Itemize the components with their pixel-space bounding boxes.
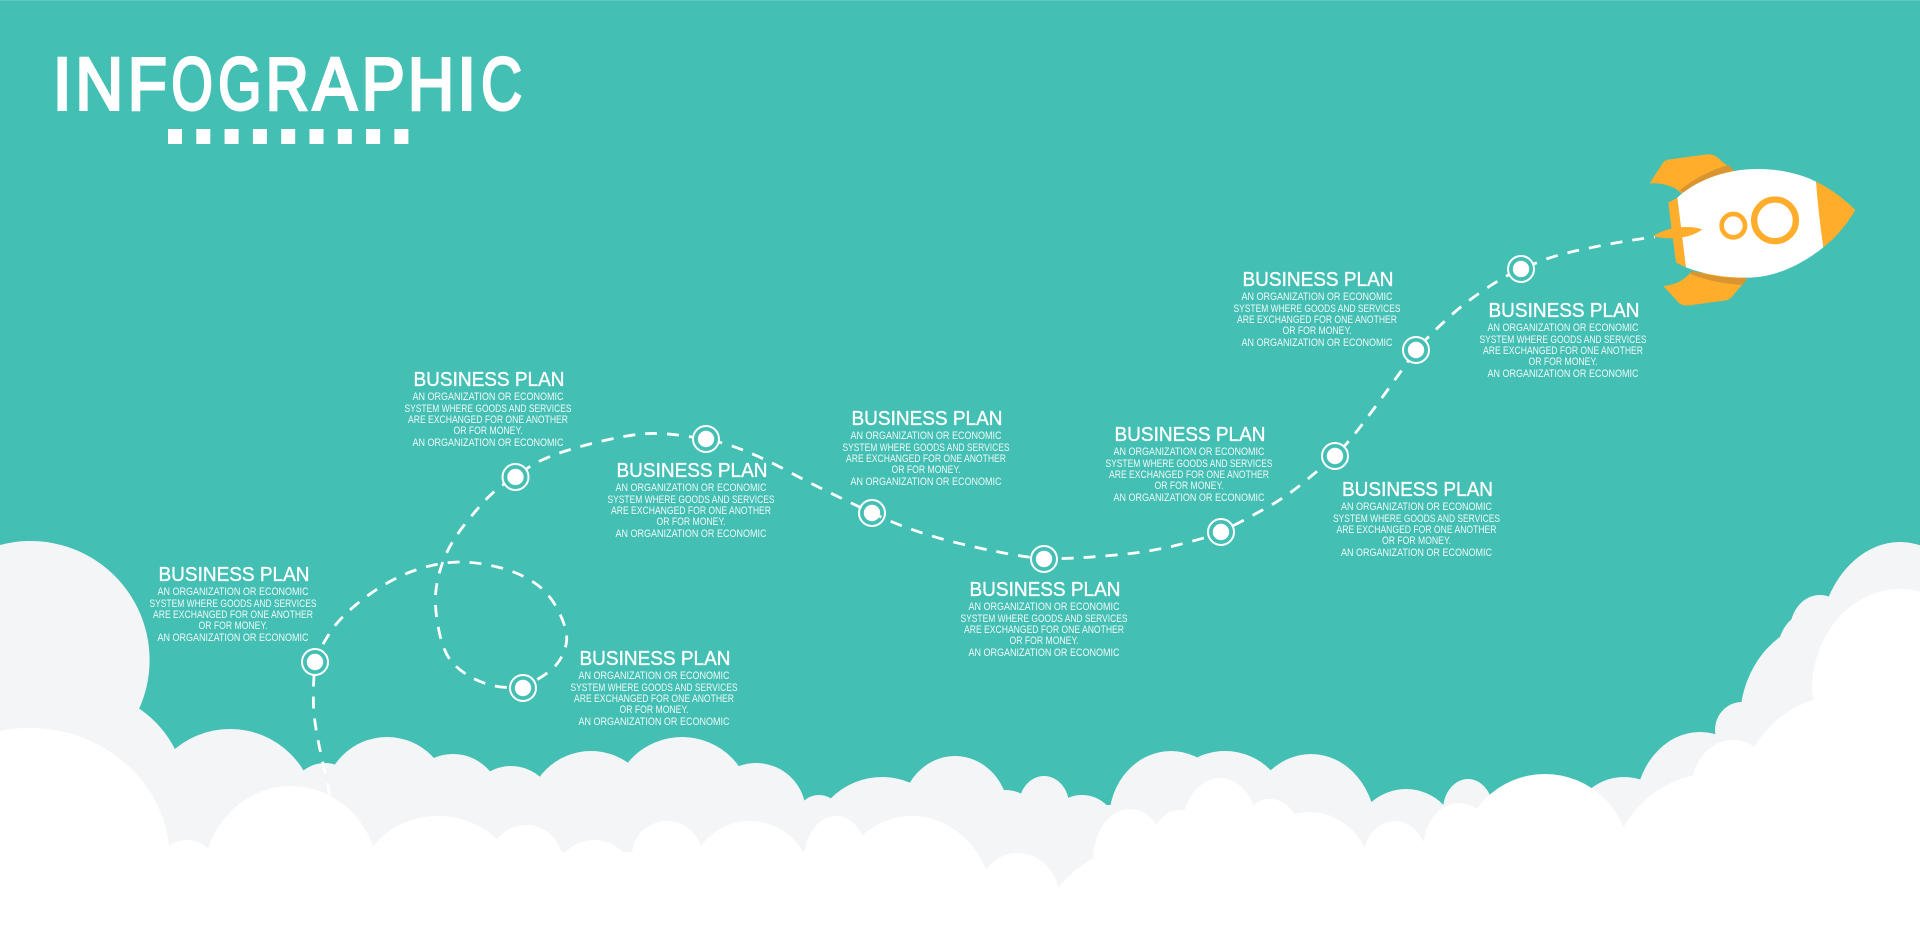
- text block 10: BUSINESS PLAN: [1488, 300, 1640, 322]
- text block 8: OR FOR MONEY.: [1382, 535, 1451, 547]
- text block 2: [570, 648, 738, 728]
- title: I: [52, 42, 72, 125]
- text block 6: AN ORGANIZATION OR ECONOMIC: [968, 647, 1120, 659]
- node 4: [693, 426, 719, 452]
- icon: rocket: [1650, 154, 1855, 306]
- text block 5: ARE EXCHANGED FOR ONE ANOTHER: [846, 453, 1006, 465]
- text block 7: OR FOR MONEY.: [1154, 480, 1224, 492]
- text block 3: SYSTEM WHERE GOODS AND SERVICES: [404, 403, 572, 415]
- text block 3: AN ORGANIZATION OR ECONOMIC: [412, 437, 564, 449]
- node 3: [502, 464, 528, 490]
- title: C: [481, 42, 522, 125]
- node 8: [1322, 443, 1348, 469]
- text block 10: [1480, 300, 1646, 380]
- text block 10: SYSTEM WHERE GOODS AND SERVICES: [1480, 334, 1646, 346]
- text block 10: ARE EXCHANGED FOR ONE ANOTHER: [1483, 345, 1643, 357]
- text block 3: [404, 369, 572, 449]
- text block 5: [842, 408, 1010, 488]
- text block 7: SYSTEM WHERE GOODS AND SERVICES: [1106, 458, 1272, 470]
- text block 5: OR FOR MONEY.: [892, 464, 960, 476]
- title: G: [218, 42, 262, 125]
- text block 4: ARE EXCHANGED FOR ONE ANOTHER: [611, 505, 771, 517]
- text block 10: OR FOR MONEY.: [1528, 356, 1598, 368]
- text block 4: SYSTEM WHERE GOODS AND SERVICES: [608, 494, 774, 506]
- title: A: [313, 42, 357, 125]
- node 7: [1208, 519, 1234, 545]
- text block 1: AN ORGANIZATION OR ECONOMIC: [158, 586, 309, 598]
- text block 8: SYSTEM WHERE GOODS AND SERVICES: [1333, 513, 1500, 525]
- title: I: [457, 42, 476, 125]
- text block 8: AN ORGANIZATION OR ECONOMIC: [1341, 501, 1492, 513]
- text block 4: AN ORGANIZATION OR ECONOMIC: [616, 482, 767, 494]
- text block 3: AN ORGANIZATION OR ECONOMIC: [412, 391, 564, 403]
- title: N: [75, 42, 123, 125]
- text block 1: SYSTEM WHERE GOODS AND SERVICES: [150, 598, 316, 610]
- text block 10: AN ORGANIZATION OR ECONOMIC: [1488, 368, 1639, 380]
- text block 1: BUSINESS PLAN: [158, 564, 310, 586]
- text block 6: BUSINESS PLAN: [970, 579, 1120, 601]
- title: O: [172, 42, 213, 125]
- text block 5: AN ORGANIZATION OR ECONOMIC: [850, 430, 1002, 442]
- node 5: [859, 500, 885, 526]
- node 2: [510, 675, 536, 701]
- text block 7: AN ORGANIZATION OR ECONOMIC: [1114, 492, 1265, 504]
- text block 6: ARE EXCHANGED FOR ONE ANOTHER: [964, 624, 1124, 636]
- node 6: [1031, 546, 1057, 572]
- text block 8: BUSINESS PLAN: [1342, 479, 1493, 501]
- text block 4: OR FOR MONEY.: [656, 516, 726, 528]
- text block 1: AN ORGANIZATION OR ECONOMIC: [158, 632, 309, 644]
- text block 2: BUSINESS PLAN: [580, 648, 730, 670]
- text block 9: AN ORGANIZATION OR ECONOMIC: [1242, 337, 1393, 349]
- text block 6: OR FOR MONEY.: [1010, 635, 1078, 647]
- text block 7: AN ORGANIZATION OR ECONOMIC: [1114, 446, 1265, 458]
- text block 1: OR FOR MONEY.: [198, 620, 268, 632]
- title: P: [362, 42, 405, 125]
- text block 6: AN ORGANIZATION OR ECONOMIC: [968, 601, 1120, 613]
- text block 7: [1106, 424, 1272, 504]
- text block 3: BUSINESS PLAN: [414, 369, 564, 391]
- text block 1: ARE EXCHANGED FOR ONE ANOTHER: [153, 609, 313, 621]
- text block 9: AN ORGANIZATION OR ECONOMIC: [1242, 291, 1393, 303]
- text block 8: ARE EXCHANGED FOR ONE ANOTHER: [1336, 524, 1497, 536]
- text block 8: [1333, 479, 1500, 559]
- text block 2: AN ORGANIZATION OR ECONOMIC: [578, 716, 730, 728]
- text block 4: BUSINESS PLAN: [616, 460, 768, 482]
- text block 4: AN ORGANIZATION OR ECONOMIC: [616, 528, 767, 540]
- text block 3: OR FOR MONEY.: [454, 425, 522, 437]
- node 10: [1508, 256, 1534, 282]
- text block 9: OR FOR MONEY.: [1282, 325, 1352, 337]
- text block 10: AN ORGANIZATION OR ECONOMIC: [1488, 322, 1639, 334]
- text block 6: [960, 579, 1128, 659]
- text block 2: ARE EXCHANGED FOR ONE ANOTHER: [574, 693, 734, 705]
- text block 5: AN ORGANIZATION OR ECONOMIC: [850, 476, 1002, 488]
- front cloud layer: [0, 589, 1920, 939]
- back cloud layer: [0, 541, 1920, 939]
- text block 9: SYSTEM WHERE GOODS AND SERVICES: [1234, 303, 1400, 315]
- text block 8: AN ORGANIZATION OR ECONOMIC: [1341, 547, 1492, 559]
- title dotted underline: [168, 129, 408, 144]
- text block 7: BUSINESS PLAN: [1114, 424, 1266, 446]
- title: F: [128, 42, 167, 125]
- text block 3: ARE EXCHANGED FOR ONE ANOTHER: [408, 414, 568, 426]
- text block 4: [608, 460, 774, 540]
- text block 9: ARE EXCHANGED FOR ONE ANOTHER: [1237, 314, 1397, 326]
- text block 5: BUSINESS PLAN: [852, 408, 1002, 430]
- text block 2: OR FOR MONEY.: [620, 704, 688, 716]
- text block 1: [150, 564, 316, 644]
- text block 9: [1234, 269, 1400, 349]
- node 1: [302, 649, 328, 675]
- node 9: [1403, 337, 1429, 363]
- text block 2: SYSTEM WHERE GOODS AND SERVICES: [570, 682, 738, 694]
- title: H: [408, 42, 454, 125]
- text block 2: AN ORGANIZATION OR ECONOMIC: [578, 670, 730, 682]
- text block 5: SYSTEM WHERE GOODS AND SERVICES: [842, 442, 1010, 454]
- text block 7: ARE EXCHANGED FOR ONE ANOTHER: [1109, 469, 1269, 481]
- title: R: [266, 42, 309, 125]
- flight path dashed line: [313, 237, 1655, 795]
- text block 6: SYSTEM WHERE GOODS AND SERVICES: [960, 613, 1128, 625]
- text block 9: BUSINESS PLAN: [1242, 269, 1394, 291]
